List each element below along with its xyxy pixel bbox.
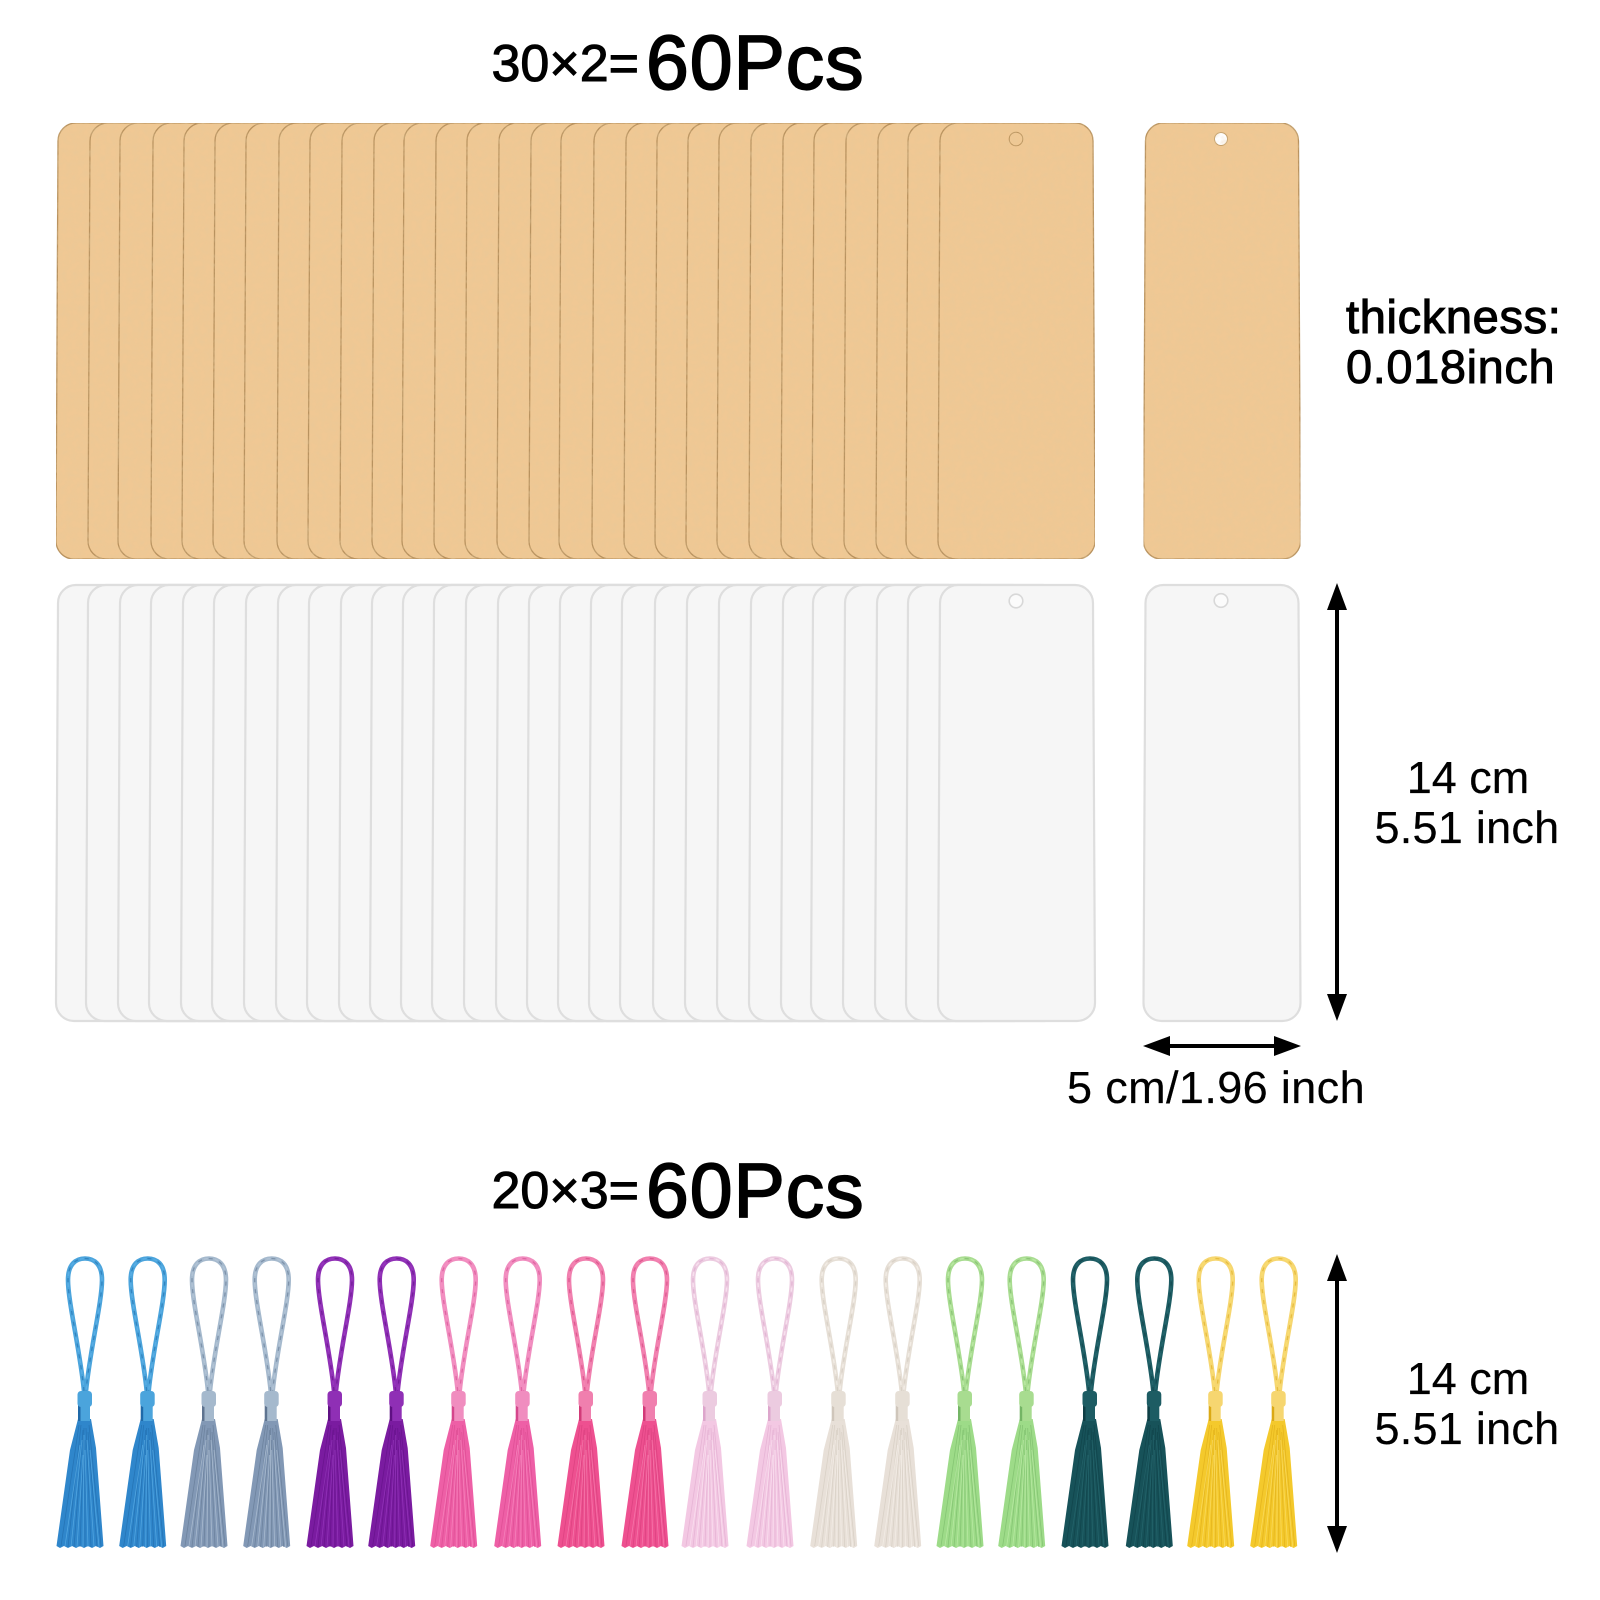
tassel: light pink 2	[746, 1258, 794, 1548]
tassel: yellow 1	[1187, 1258, 1234, 1548]
arrow: bookmark height	[1327, 583, 1347, 1021]
tassel: rose 2	[622, 1258, 668, 1548]
title: bookmarks quantity: 30×2=	[492, 35, 639, 93]
tassel: purple 1	[306, 1258, 354, 1548]
tassel: grey-blue 2	[243, 1258, 290, 1548]
height label: 14 cm	[1407, 752, 1529, 803]
tassel length label	[1374, 1353, 1559, 1454]
tassel: yellow 2	[1250, 1258, 1297, 1548]
tassel: rose 1	[558, 1258, 604, 1548]
tassel length label: 5.51 inch	[1374, 1403, 1559, 1454]
tassel: blue 2	[119, 1258, 166, 1548]
single clear bookmark	[1144, 585, 1300, 1021]
title: tassels quantity: 60Pcs	[646, 1148, 865, 1234]
arrow: tassel length	[1327, 1254, 1347, 1553]
tassel: grey-blue 1	[180, 1258, 228, 1548]
single kraft bookmark	[1144, 123, 1300, 559]
thickness label: thickness:	[1346, 290, 1561, 343]
title: tassels quantity: 20×3=	[492, 1162, 639, 1220]
tassel: green 1	[936, 1258, 984, 1548]
tassel: beige 2	[874, 1258, 921, 1548]
tassel length label: 14 cm	[1407, 1353, 1529, 1404]
tassel: green 2	[998, 1258, 1045, 1548]
thickness value: 0.018inch	[1346, 340, 1555, 393]
width label: 5 cm/1.96 inch	[1067, 1062, 1365, 1113]
tassel: pink 2	[494, 1258, 541, 1548]
tassel: light pink 1	[682, 1258, 728, 1548]
arrow: bookmark width	[1143, 1036, 1301, 1056]
title: bookmarks quantity	[492, 20, 865, 106]
tassel: blue 1	[56, 1258, 104, 1548]
tassel: teal 1	[1062, 1258, 1108, 1548]
clear bookmark stack	[56, 585, 1095, 1021]
title: bookmarks quantity: 60Pcs	[646, 20, 865, 106]
kraft bookmark stack	[56, 123, 1095, 559]
height label	[1374, 752, 1559, 853]
tassel: beige 1	[810, 1258, 857, 1548]
tassel: pink 1	[430, 1258, 477, 1548]
height label: 5.51 inch	[1374, 802, 1559, 853]
tassel: teal 2	[1126, 1258, 1173, 1548]
title: tassels quantity	[492, 1148, 865, 1234]
tassel: purple 2	[368, 1258, 415, 1548]
